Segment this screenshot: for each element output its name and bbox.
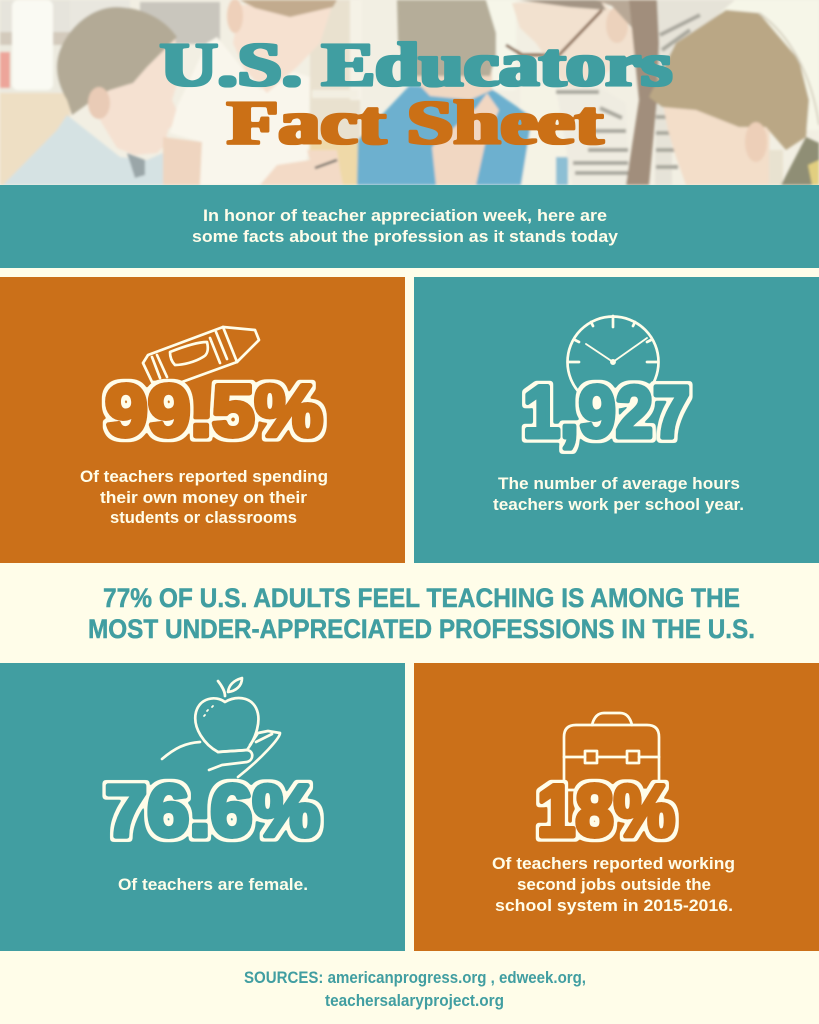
headline: [88, 583, 755, 644]
icon: apple on hand: [162, 678, 280, 777]
text: second jobs: second jobs outside the: [517, 875, 711, 894]
hand: girl: [260, 150, 343, 185]
shirt: girl: [170, 37, 310, 185]
hair: center boy: [397, 0, 496, 76]
intro band: In honor of teacher appreciation week, here are: [203, 206, 607, 225]
intro band: some facts about the profession as it stands today: [192, 227, 619, 246]
face: left boy: [100, 35, 180, 155]
title: [160, 32, 672, 158]
shirt: center boy: [357, 86, 532, 185]
text: spending: students or classrooms: [110, 508, 297, 527]
number: 1,927: 1,927: [523, 372, 690, 453]
panel: 18%: [414, 663, 819, 951]
hair: left boy: [57, 7, 177, 115]
shirt: left boy: [3, 115, 163, 185]
number: 99.5%: 99.5%: [105, 371, 323, 452]
number: 18%: 18%: [537, 771, 675, 852]
text: second jobs: Of teachers reported working: [492, 854, 735, 873]
hair: teacher ponytail: [626, 0, 659, 185]
arm: girl: [163, 137, 202, 185]
text: spending: their own money on their: [100, 488, 307, 507]
text: hours: The number of average hours: [498, 474, 740, 493]
panel: 1,927: [414, 277, 819, 563]
text: second jobs: school system in 2015-2016.: [495, 896, 733, 915]
face: teacher: [512, 2, 634, 88]
face: right boy: [662, 100, 770, 185]
headline: 77% OF U.S. ADULTS FEEL TEACHING IS AMONG THE: [103, 583, 740, 613]
shirt: teacher: [571, 87, 629, 180]
icon: clock: [568, 316, 658, 408]
text: second jobs: [492, 854, 735, 915]
number: 76.6%: 76.6%: [105, 771, 320, 852]
text: female: Of teachers are female.: [118, 875, 308, 894]
intro band: [0, 185, 819, 268]
text: spending: Of teachers reported spending: [80, 467, 328, 486]
hair: right boy: [649, 10, 809, 150]
header photo: children and teacher: [0, 0, 819, 185]
panel: 99.5%: [0, 277, 405, 563]
sources: SOURCES: americanprogress.org , edweek.org,: [244, 968, 586, 987]
face and hand: center boy: [417, 72, 493, 100]
text: hours: teachers work per school year.: [493, 495, 744, 514]
text: hours: [493, 474, 744, 514]
title: U.S. Educators: [160, 32, 672, 100]
headline: MOST UNDER-APPRECIATED PROFESSIONS IN THE U.S.: [88, 614, 755, 644]
icon: briefcase: [564, 713, 659, 790]
sources: [244, 968, 586, 1010]
sources: teachersalaryproject.org: [325, 991, 504, 1010]
plaid shirt: [781, 137, 819, 185]
panel: 76.6%: [0, 663, 405, 951]
title: Fact Sheet: [227, 90, 603, 158]
icon: crayon: [143, 327, 259, 382]
text: spending: [80, 467, 328, 527]
face: girl: [233, 3, 333, 93]
